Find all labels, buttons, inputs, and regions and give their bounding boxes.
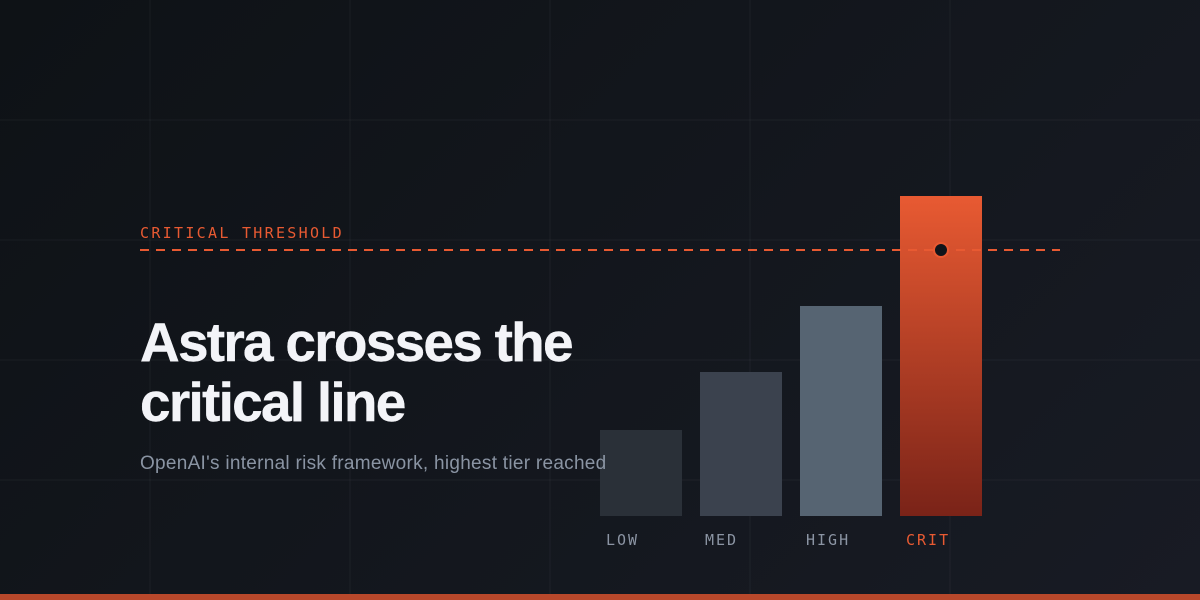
- threshold label: CRITICAL THRESHOLD: [140, 224, 344, 242]
- title: [140, 311, 572, 433]
- bar: critical: [900, 196, 982, 516]
- label: low: LOW: [606, 531, 639, 549]
- threshold marker dot: [934, 243, 948, 257]
- bar: high: [800, 306, 882, 516]
- bar: low: [600, 430, 682, 516]
- title: critical line: [140, 371, 405, 433]
- title: Astra crosses the: [140, 311, 572, 373]
- subtitle: OpenAI's internal risk framework, highest tier reached: [140, 453, 606, 474]
- label: high: HIGH: [806, 531, 850, 549]
- label: medium: MED: [705, 531, 738, 549]
- label: critical: CRIT: [906, 531, 950, 549]
- bar: medium: [700, 372, 782, 516]
- threshold line: [140, 249, 1060, 251]
- bottom accent bar: [0, 594, 1200, 600]
